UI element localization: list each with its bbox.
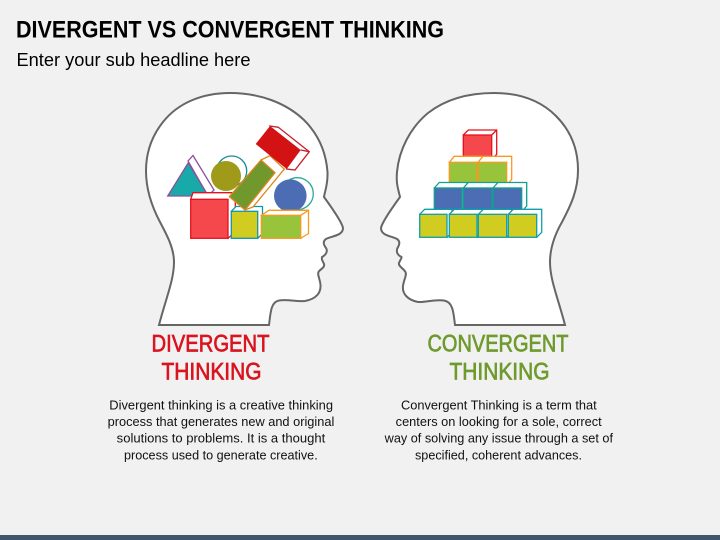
yellow cube: [231, 206, 262, 238]
tilted green block: [229, 156, 284, 210]
olive sphere: [211, 156, 247, 191]
heading: divergent thinking: THINKING: [162, 358, 262, 385]
red cube: [191, 193, 235, 238]
text: divergent description: [108, 398, 334, 462]
red top cube: [463, 130, 497, 159]
heading: convergent thinking: THINKING: [450, 358, 550, 385]
subtitle: Enter your sub headline here: [16, 49, 250, 70]
blue row: [434, 182, 527, 212]
text: convergent description: way of solving any issue through a set of: [384, 432, 614, 446]
triangle prism: [168, 156, 214, 196]
text: convergent description: centers on looking for a sole, correct: [396, 415, 602, 429]
text: convergent description: specified, coherent advances.: [415, 448, 582, 462]
heading: divergent thinking: DIVERGENT: [152, 331, 270, 358]
text: convergent description: Convergent Thinking is a term that: [401, 398, 597, 412]
heading: divergent thinking: [152, 331, 270, 385]
blocks: divergent shapes: [168, 126, 313, 238]
text: convergent description: [384, 398, 614, 462]
red tilted block: [256, 126, 309, 170]
title: DIVERGENT VS CONVERGENT THINKING: [16, 16, 444, 43]
yellow row: [420, 209, 542, 237]
text: divergent description: solutions to problems. It is a thought: [117, 432, 326, 446]
blue sphere: [274, 178, 313, 212]
footer bar: [0, 535, 720, 540]
text: divergent description: process that generates new and original: [108, 415, 334, 429]
head: divergent: [146, 93, 343, 325]
green box: [261, 210, 308, 238]
head: convergent: [381, 93, 578, 325]
heading: convergent thinking: CONVERGENT: [428, 331, 569, 358]
blocks: convergent pyramid: [420, 130, 542, 237]
text: divergent description: Divergent thinking is a creative thinking: [109, 398, 333, 412]
heading: convergent thinking: [428, 331, 569, 385]
text: divergent description: process used to generate creative.: [124, 448, 318, 462]
green row: [449, 156, 512, 185]
